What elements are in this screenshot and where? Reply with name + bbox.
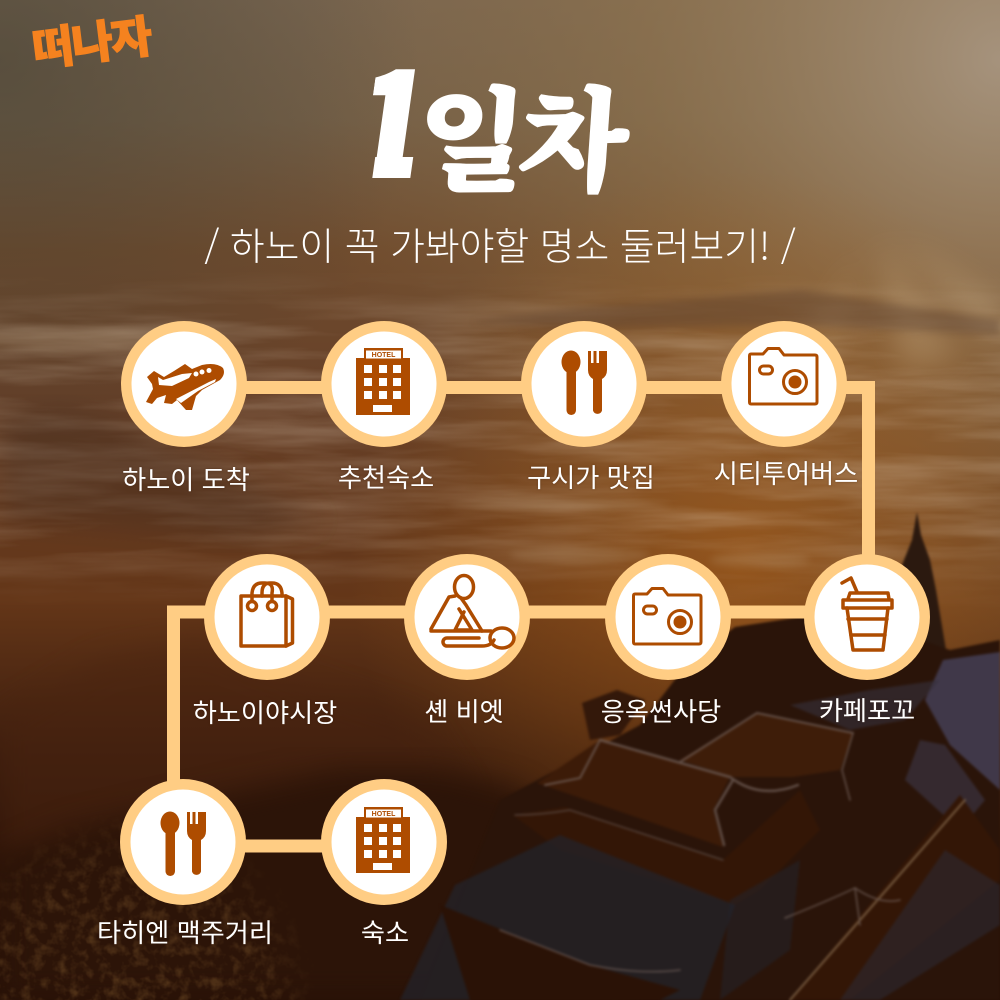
label: 하노이 도착: 하노이 도착 [122, 465, 250, 495]
clouds mid [0, 328, 810, 567]
stop: hotel 2 [321, 779, 447, 905]
label: 하노이야시장: 하노이야시장 [193, 698, 337, 728]
temple roofs [925, 652, 1000, 790]
label: 응옥썬사당: 응옥썬사당 [601, 697, 721, 727]
title: 1일차: 일차 [411, 53, 629, 214]
title: 1일차: 1 [333, 10, 452, 221]
label: 구시가 맛집: 구시가 맛집 [527, 463, 655, 493]
dark lower left slope [0, 770, 640, 1000]
route line [174, 388, 868, 846]
bushes [0, 842, 296, 1000]
pagoda [886, 512, 946, 650]
stop: massage [404, 554, 530, 680]
label: 셴 비엣: 셴 비엣 [424, 697, 504, 727]
label: 타히엔 맥주거리: 타히엔 맥주거리 [97, 918, 273, 948]
stop: camera 2 [605, 554, 731, 680]
label: 추천숙소: 추천숙소 [338, 463, 434, 493]
label: 시티투어버스: 시티투어버스 [714, 459, 858, 489]
distant ridges [470, 290, 1000, 335]
stop: hotel: HOTEL [372, 352, 396, 359]
label: 숙소: 숙소 [361, 918, 409, 948]
stop: food 2 [120, 779, 246, 905]
label: 카페포꼬: 카페포꼬 [819, 696, 915, 726]
stop: cup [804, 554, 930, 680]
subtitle: / 하노이 꼭 가봐야할 명소 둘러보기! / [204, 216, 796, 271]
stop: food [521, 321, 647, 447]
stop: plane [121, 321, 247, 447]
stop: bag [204, 554, 330, 680]
logo: 떠나자: 떠나자 [28, 0, 154, 79]
stop: hotel [321, 321, 447, 447]
stop: hotel 2: HOTEL [372, 811, 396, 818]
stop: camera [721, 321, 847, 447]
dark hill behind temple [420, 617, 1000, 1000]
